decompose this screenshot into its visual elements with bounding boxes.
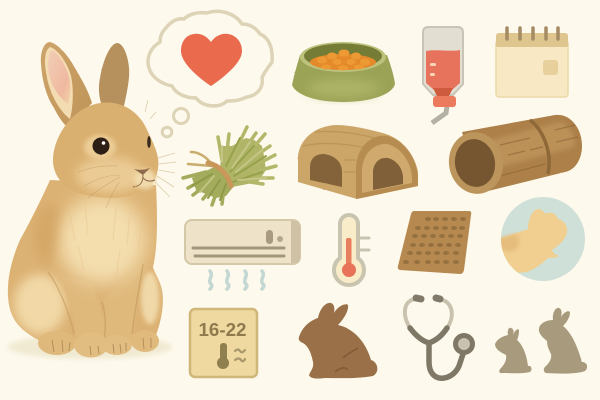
- air conditioner: [185, 220, 300, 289]
- front paw left: [74, 332, 108, 358]
- hay tie: [191, 152, 210, 162]
- tunnel opening: [451, 136, 499, 190]
- far ear: [99, 43, 129, 106]
- wooden tunnel: [444, 115, 582, 198]
- large rabbit silhouette: [539, 308, 587, 374]
- calendar rings: [507, 28, 558, 39]
- ear tips: [416, 298, 421, 299]
- thermometer casing: [334, 215, 364, 285]
- temperature range label: 16-22: [198, 320, 246, 340]
- bowl rim: [300, 42, 386, 72]
- ear tubes: [405, 299, 416, 328]
- thermometer mercury: [346, 238, 352, 268]
- hideout shell: [298, 125, 418, 199]
- calendar date square: [543, 60, 558, 75]
- front leg left: [55, 272, 108, 345]
- wooden hideout: [298, 125, 418, 199]
- food bowl: [292, 42, 395, 102]
- card thermometer icon: [217, 343, 229, 369]
- thermometer scale marks: [361, 238, 369, 250]
- calendar header: [496, 33, 568, 47]
- thermometer: [334, 215, 369, 285]
- paw: [495, 209, 567, 273]
- thought bubble large dot: [174, 108, 188, 124]
- main rabbit: [8, 42, 176, 359]
- eye: [92, 138, 110, 154]
- hay blades upper: [226, 138, 266, 182]
- nose and mouth: [133, 168, 155, 187]
- mat dots: [403, 217, 466, 264]
- water highlights: [430, 63, 436, 76]
- paw in circle: [495, 197, 585, 281]
- thought bubble: [148, 11, 272, 137]
- stethoscope: [405, 298, 475, 378]
- temperature card: [190, 309, 257, 377]
- fur strokes: [70, 205, 142, 278]
- tunnel band: [530, 120, 549, 174]
- left haunch highlight: [14, 274, 66, 334]
- water: [426, 50, 460, 90]
- hideout right door: [373, 158, 403, 190]
- card comfort symbols: [235, 350, 245, 361]
- hay bundle: [183, 127, 276, 205]
- hay mass lower: [192, 166, 234, 198]
- back paw left: [38, 331, 76, 355]
- hideout front arch: [356, 136, 418, 199]
- bowl body: [292, 55, 395, 102]
- small rabbit silhouette: [495, 328, 531, 373]
- muzzle and cheek highlight: [76, 157, 144, 193]
- card background: [190, 309, 257, 377]
- spout: [432, 106, 447, 123]
- hideout grain: [303, 132, 382, 172]
- heart: [181, 34, 242, 86]
- tunnel rim: [444, 128, 508, 198]
- corrugated mat: [398, 211, 471, 274]
- near ear: [41, 42, 92, 128]
- hay mass upper: [220, 138, 266, 187]
- head: [53, 103, 158, 198]
- tunnel body: [462, 115, 582, 193]
- near ear inner: [45, 47, 73, 119]
- bottle cap: [433, 96, 456, 107]
- tunnel grain: [500, 125, 578, 176]
- hideout left door: [310, 154, 342, 187]
- front paw right: [102, 335, 132, 355]
- cloud outline: [148, 11, 272, 106]
- brown rabbit: [299, 303, 377, 379]
- hay spikes: [218, 127, 276, 184]
- chest piece: [453, 333, 475, 355]
- cold air waves: [210, 271, 264, 289]
- brown rabbit haunch line: [335, 348, 358, 372]
- body: [8, 180, 163, 342]
- front leg right: [108, 326, 110, 336]
- calendar page: [496, 40, 568, 97]
- chest highlight: [58, 196, 146, 284]
- main tube: [410, 328, 463, 378]
- far eye: [147, 136, 151, 148]
- hay blades lower: [192, 174, 226, 200]
- back paw right: [131, 330, 159, 352]
- bottle glass: [423, 27, 463, 95]
- whiskers: [145, 100, 176, 197]
- ground shadow: [8, 335, 172, 359]
- shaded flank: [36, 206, 62, 262]
- unit body: [185, 220, 300, 264]
- vent lines: [193, 248, 284, 256]
- water bottle: [423, 27, 463, 123]
- face whisker lines: [78, 166, 120, 208]
- calendar: [496, 28, 568, 97]
- leg outlines: [48, 264, 143, 340]
- right haunch highlight: [141, 272, 159, 324]
- thought bubble small dot: [162, 127, 172, 137]
- unit controls: [266, 230, 273, 244]
- food: [310, 50, 376, 70]
